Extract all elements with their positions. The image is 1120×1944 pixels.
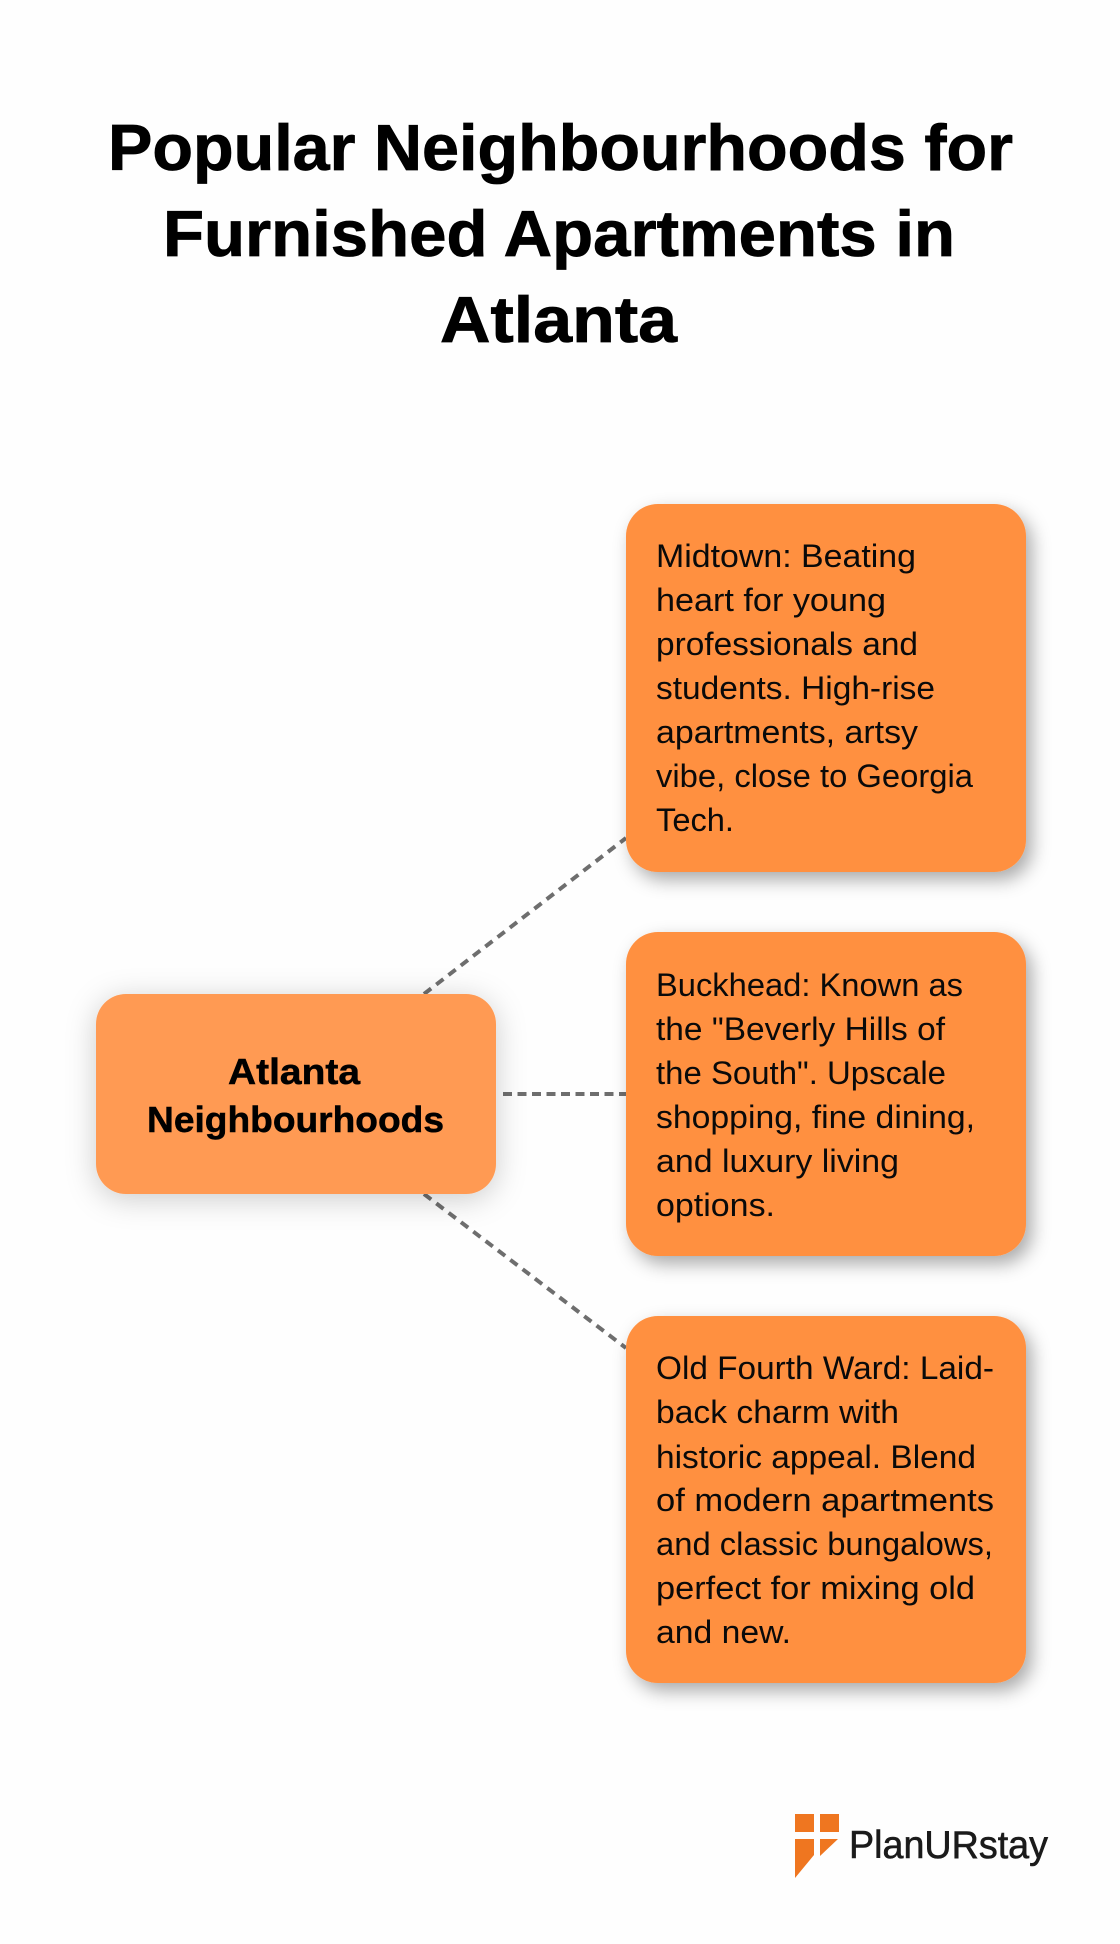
Buckhead text: the South". Upscale	[656, 1055, 946, 1091]
connector: centre to Old Fourth Ward	[424, 1194, 626, 1348]
centre label: Neighbourhoods	[147, 1099, 444, 1140]
panel: Midtown	[626, 504, 1026, 872]
panel: Atlanta Neighbourhoods	[96, 994, 496, 1194]
Midtown text: apartments, artsy	[656, 714, 918, 750]
logo: PlanURstay	[795, 1814, 1048, 1878]
Buckhead text: options.	[656, 1187, 775, 1223]
Midtown text	[656, 538, 973, 838]
Midtown text: students. High-rise	[656, 670, 935, 706]
connector: centre to Buckhead	[503, 1092, 626, 1096]
Old Fourth Ward text: back charm with	[656, 1394, 899, 1430]
panel: Buckhead	[626, 932, 1026, 1256]
Old Fourth Ward text: and classic bungalows,	[656, 1526, 993, 1562]
Buckhead text: shopping, fine dining,	[656, 1099, 975, 1135]
Old Fourth Ward text: Old Fourth Ward: Laid-	[656, 1350, 994, 1386]
centre label: Atlanta	[228, 1051, 361, 1092]
icon: logo mark	[795, 1814, 839, 1878]
title: Popular Neighbourhoods for	[108, 111, 1013, 184]
Buckhead text: the "Beverly Hills of	[656, 1011, 945, 1047]
Old Fourth Ward text	[656, 1350, 994, 1650]
Midtown text: Midtown: Beating	[656, 538, 916, 574]
Midtown text: professionals and	[656, 626, 918, 662]
Buckhead text	[656, 967, 975, 1223]
centre label	[147, 1051, 444, 1140]
Buckhead text: Buckhead: Known as	[656, 967, 963, 1003]
Midtown text: heart for young	[656, 582, 886, 618]
Buckhead text: and luxury living	[656, 1143, 899, 1179]
title	[108, 111, 1013, 356]
Old Fourth Ward text: perfect for mixing old	[656, 1570, 975, 1606]
panel: Old Fourth Ward	[626, 1316, 1026, 1683]
connector: centre to Midtown	[424, 838, 626, 994]
Midtown text: vibe, close to Georgia	[656, 758, 973, 794]
Old Fourth Ward text: of modern apartments	[656, 1482, 994, 1518]
title: Atlanta	[440, 283, 678, 356]
title: Furnished Apartments in	[163, 197, 955, 270]
logo wordmark: PlanURstay	[849, 1824, 1048, 1867]
Old Fourth Ward text: historic appeal. Blend	[656, 1439, 976, 1475]
Midtown text: Tech.	[656, 802, 734, 838]
Old Fourth Ward text: and new.	[656, 1614, 791, 1650]
